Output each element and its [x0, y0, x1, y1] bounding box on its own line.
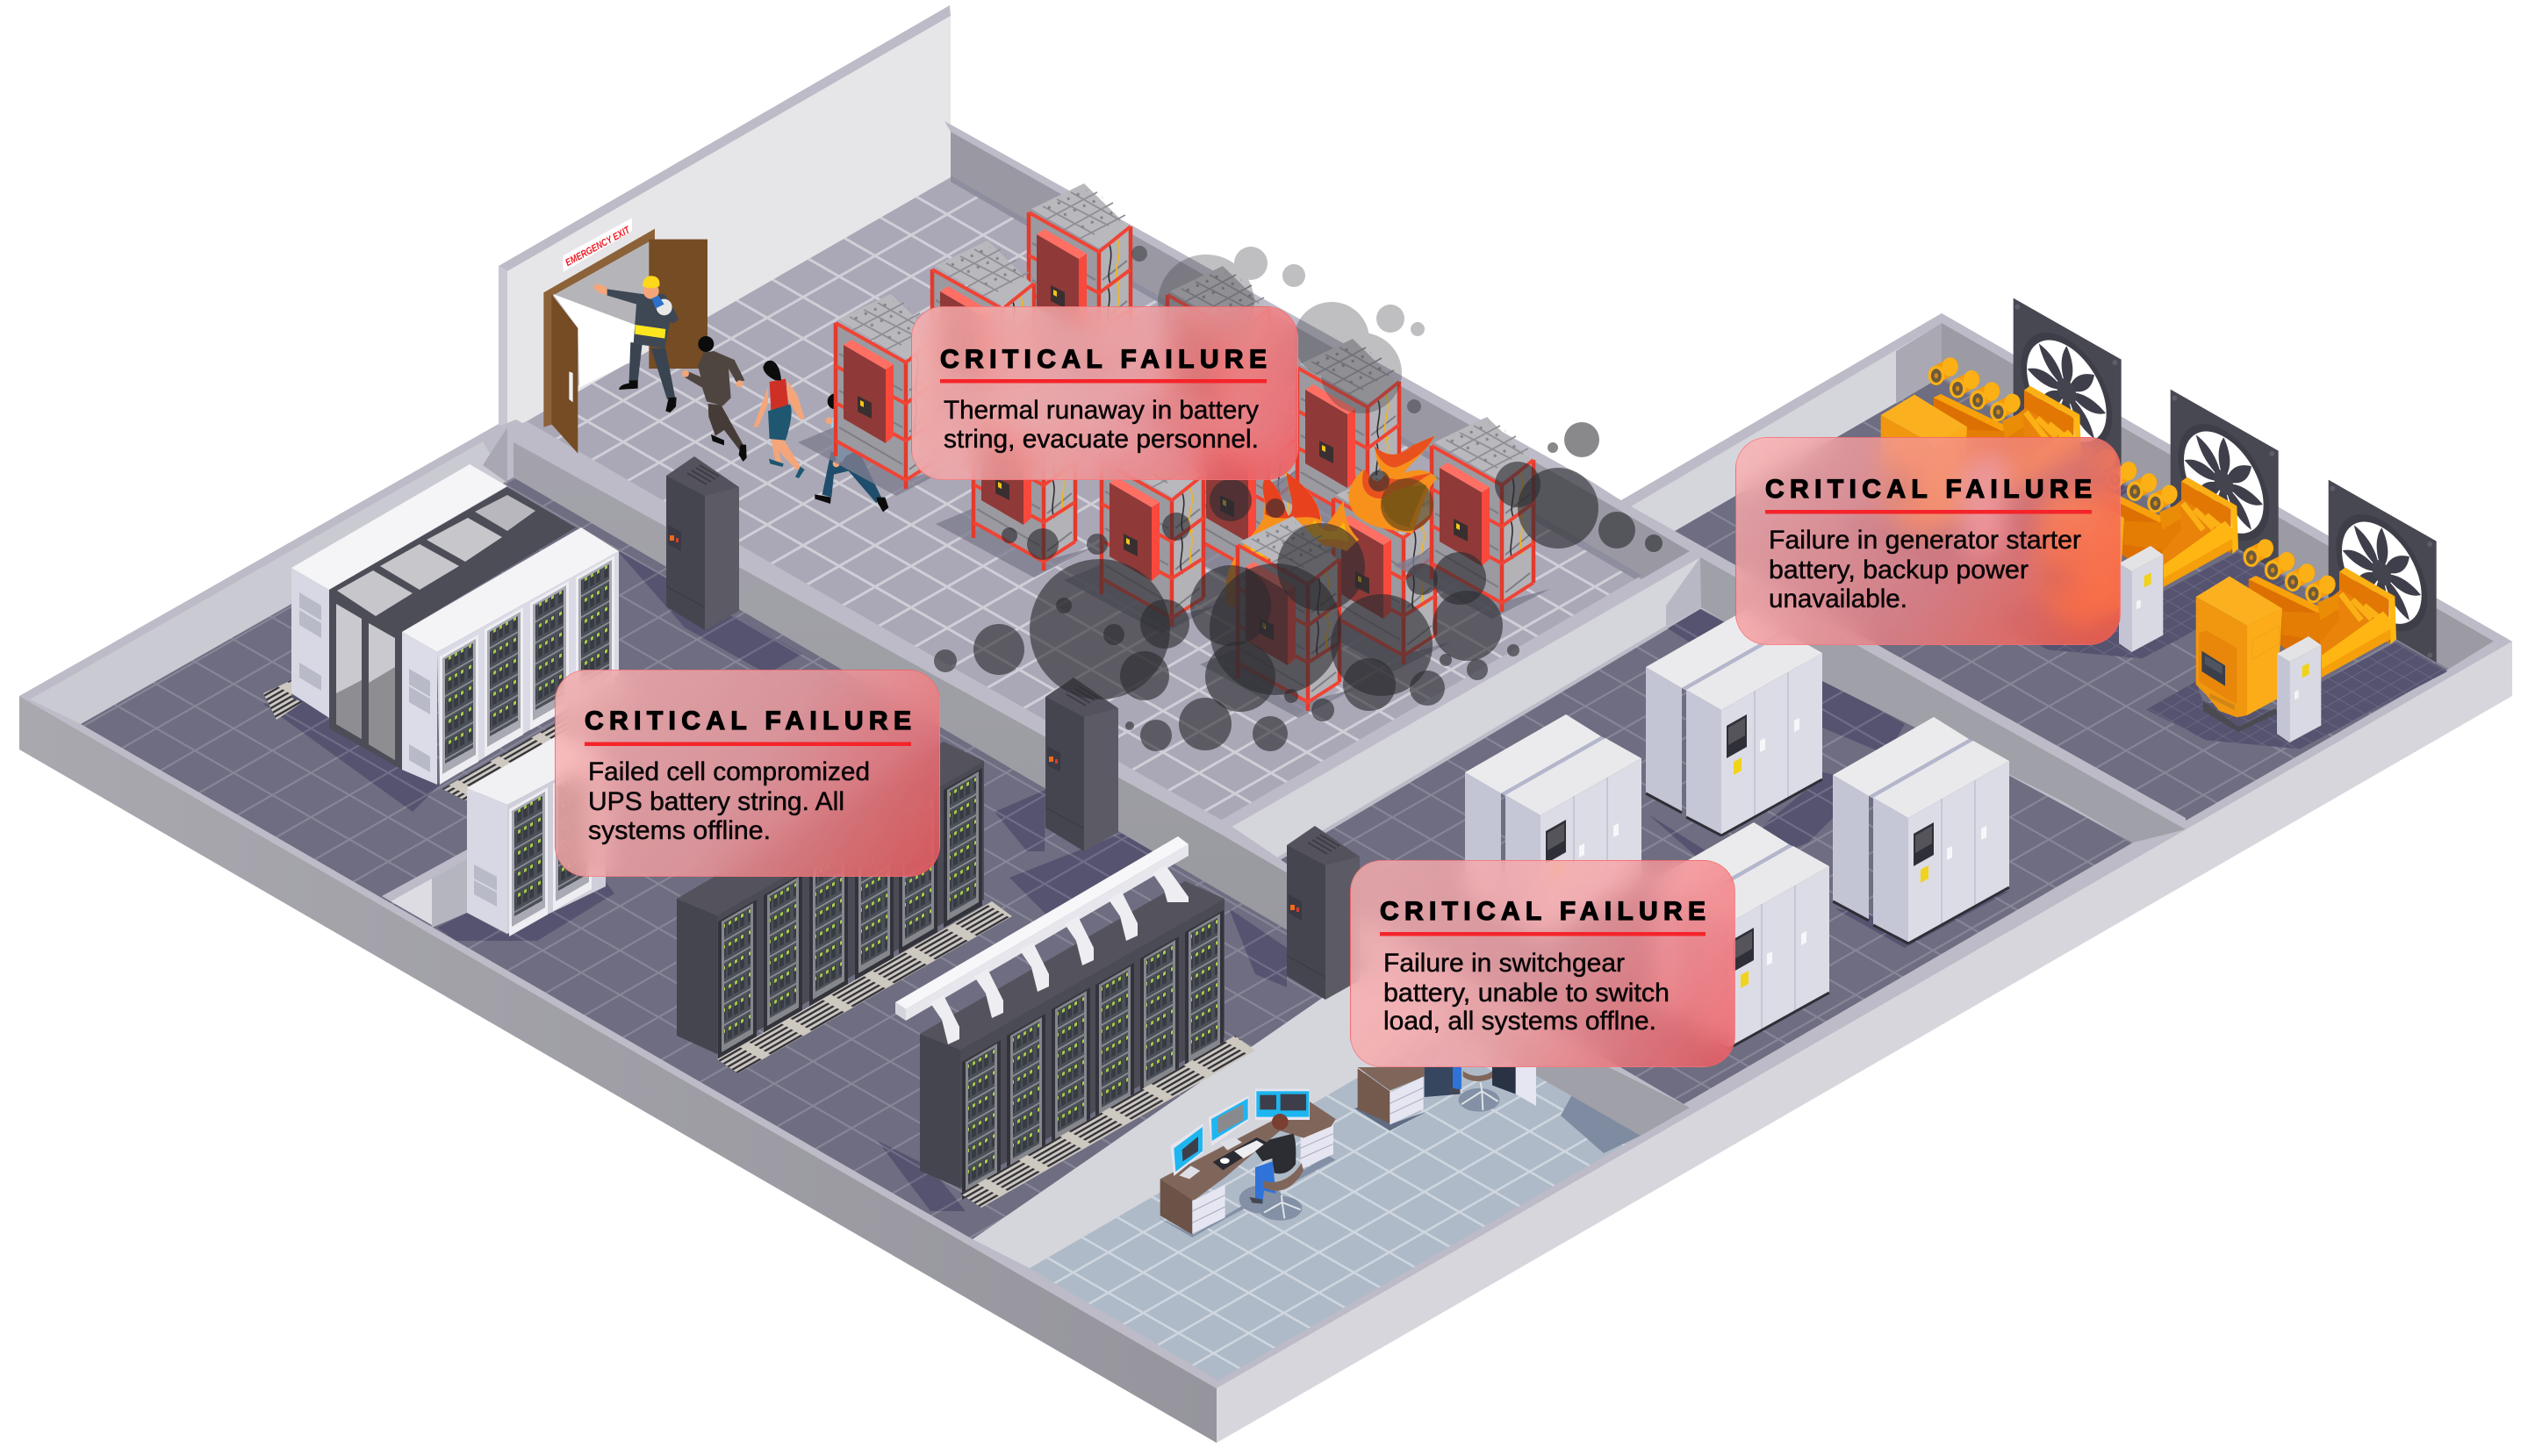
generator set 2: [2038, 390, 2279, 652]
callout: battery thermal runaway: [911, 306, 1298, 480]
person: safety warden: [593, 276, 679, 412]
body text: Failure in generator starter: [1768, 525, 2081, 555]
heading: CRITICAL FAILURE: [1380, 897, 1705, 925]
generator room walls: [1621, 313, 2512, 843]
vent strip: front row: [960, 1036, 1255, 1208]
vent strip: enclosure: [442, 687, 636, 800]
person: woman: [753, 361, 805, 478]
generator set 3: [2196, 480, 2437, 742]
battery floor front lip: [1217, 551, 1700, 829]
underline: [939, 379, 1266, 383]
floor: control room: [1030, 1025, 1641, 1381]
battery rack front: [1200, 516, 1356, 718]
body text: battery, unable to switch: [1383, 978, 1670, 1008]
body text: load, all systems offlne.: [1383, 1006, 1655, 1036]
control room dark tile patch: [1561, 1088, 1641, 1153]
emergency exit door: [543, 218, 707, 454]
generator set 1: [1881, 298, 2122, 561]
floor shadow zones: server hall: [263, 549, 1287, 1211]
body text: [1383, 948, 1670, 1036]
second desk: [1354, 1067, 1536, 1130]
body text: [943, 395, 1259, 453]
battery room tall wall: [499, 5, 951, 430]
battery room front wall: [483, 420, 1288, 930]
generator floor shadows: [1831, 461, 2447, 749]
emergency exit sign: EMERGENCY EXIT: [564, 225, 633, 269]
battery room back wall: [944, 121, 1700, 579]
body text: unavailable.: [1768, 585, 1907, 613]
fire flames: [1225, 436, 1437, 608]
server row rear: [677, 742, 984, 1059]
people evacuating: [593, 276, 888, 512]
smoke cloud lower: [934, 462, 1663, 751]
floor shadow zones: switchgear room: [1648, 609, 2010, 948]
floor: generator room: [1675, 377, 2449, 821]
body text: battery, backup power: [1768, 555, 2028, 585]
dark cabinet: switchgear room: [1287, 826, 1360, 1000]
heading: CRITICAL FAILURE: [939, 344, 1266, 374]
body text: UPS battery string. All: [588, 786, 844, 816]
underline: [1764, 509, 2091, 513]
underline: [1380, 932, 1705, 936]
overhead white cable tray: [895, 836, 1189, 1044]
callout: UPS battery string: [555, 670, 940, 877]
callout: switchgear battery: [1350, 860, 1735, 1067]
person: man in blue sweater: [815, 393, 888, 512]
control room side wall: [1448, 992, 1690, 1136]
vent strip: rear row: [717, 901, 1012, 1073]
smoke cloud upper: [1131, 246, 1599, 457]
floor: server hall: [81, 477, 1369, 1239]
floor: switchgear room: [1273, 609, 2133, 1104]
body text: systems offline.: [588, 816, 771, 844]
battery rack rows back: [798, 183, 1550, 671]
body text: [1768, 525, 2081, 613]
left back wall: [30, 441, 507, 724]
body text: Thermal runaway in battery: [943, 395, 1259, 425]
server row front: [920, 881, 1224, 1200]
small divider wall: [382, 850, 467, 928]
person: man in suit: [682, 336, 747, 462]
body text: string, evacuate personnel.: [943, 425, 1259, 453]
battery room floor: [527, 177, 1635, 822]
control desk and operator: [1157, 1067, 1536, 1237]
callout: generator starter battery: [1735, 437, 2121, 645]
band between battery room and switchgear room: [1227, 557, 1700, 860]
body text: Failure in switchgear: [1383, 948, 1624, 978]
underline: [585, 742, 911, 746]
body text: Failed cell compromized: [588, 757, 869, 786]
white rack near partition: [467, 733, 606, 936]
heading: CRITICAL FAILURE: [585, 706, 911, 735]
white cabinets switchgear: [1465, 609, 2009, 1049]
control room partition band: [973, 965, 1448, 1268]
white server enclosure with glass aisle: [291, 464, 619, 785]
dark cabinet: front wall: [1045, 678, 1118, 851]
heading: CRITICAL FAILURE: [1764, 474, 2091, 504]
vent strip: left: [263, 680, 303, 720]
dark cabinet: battery room left: [666, 456, 739, 630]
body text: [588, 757, 869, 844]
